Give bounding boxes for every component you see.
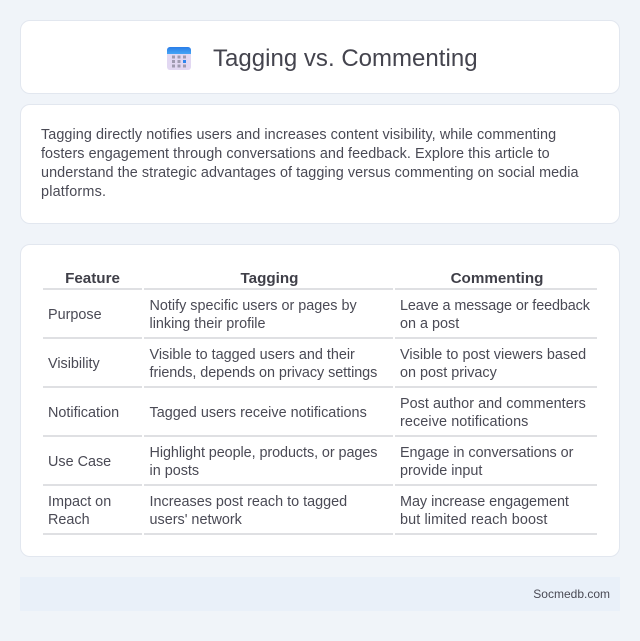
row: Notification: Notification: [48, 405, 119, 421]
row: Visibility: on post privacy: [400, 365, 497, 381]
row: Notification: receive notifications: [400, 414, 528, 430]
row: Visibility: [48, 347, 586, 381]
footer credit: Socmedb.com: [533, 587, 610, 601]
footer: [20, 577, 620, 611]
row: Purpose: Purpose: [48, 307, 102, 323]
row: Impact on Reach: Increases post reach to tagged: [150, 494, 347, 510]
panel: introduction: [20, 104, 620, 224]
table header: [65, 270, 543, 287]
row: Impact on Reach: Impact on: [48, 494, 111, 510]
row: Notification: [48, 396, 586, 430]
table header: Tagging: [241, 270, 298, 287]
row: Purpose: Notify specific users or pages by: [150, 298, 357, 314]
row: Visibility: friends, depends on privacy settings: [150, 365, 377, 381]
row: Purpose: linking their profile: [150, 316, 265, 332]
row: Impact on Reach: but limited reach boost: [400, 512, 548, 528]
intro text: understand the strategic advantages of tagging versus commenting on social media: [41, 165, 579, 181]
row: Impact on Reach: [48, 494, 569, 528]
intro text: [41, 127, 579, 200]
panel: title card: [20, 20, 620, 94]
row: Visibility: Visibility: [48, 356, 100, 372]
panel: comparison table: [20, 244, 620, 557]
row: Impact on Reach: Reach: [48, 512, 90, 528]
row: Use Case: provide input: [400, 463, 482, 479]
row: Use Case: Use Case: [48, 454, 111, 470]
row: Impact on Reach: May increase engagement: [400, 494, 569, 510]
row: Notification: Tagged users receive notifications: [150, 405, 367, 421]
row: Purpose: [48, 298, 590, 332]
row: Visibility: Visible to tagged users and their: [150, 347, 355, 363]
row: Use Case: Highlight people, products, or pages: [150, 445, 377, 461]
row: Use Case: [48, 445, 574, 479]
icon: calendar: [167, 47, 191, 70]
row: Impact on Reach: users' network: [150, 512, 242, 528]
row: Use Case: Engage in conversations or: [400, 445, 573, 461]
intro text: fosters engagement through conversations and feedback. Explore this article to: [41, 146, 550, 162]
row: Notification: Post author and commenters: [400, 396, 586, 412]
row: Purpose: on a post: [400, 316, 459, 332]
table header: Feature: [65, 270, 120, 287]
row: Use Case: in posts: [150, 463, 199, 479]
intro text: Tagging directly notifies users and increases content visibility, while commenting: [41, 127, 556, 143]
intro text: platforms.: [41, 184, 106, 200]
row: Visibility: Visible to post viewers based: [400, 347, 586, 363]
table header: Commenting: [451, 270, 543, 287]
title: Tagging vs. Commenting: [213, 45, 478, 72]
row: Purpose: Leave a message or feedback: [400, 298, 590, 314]
